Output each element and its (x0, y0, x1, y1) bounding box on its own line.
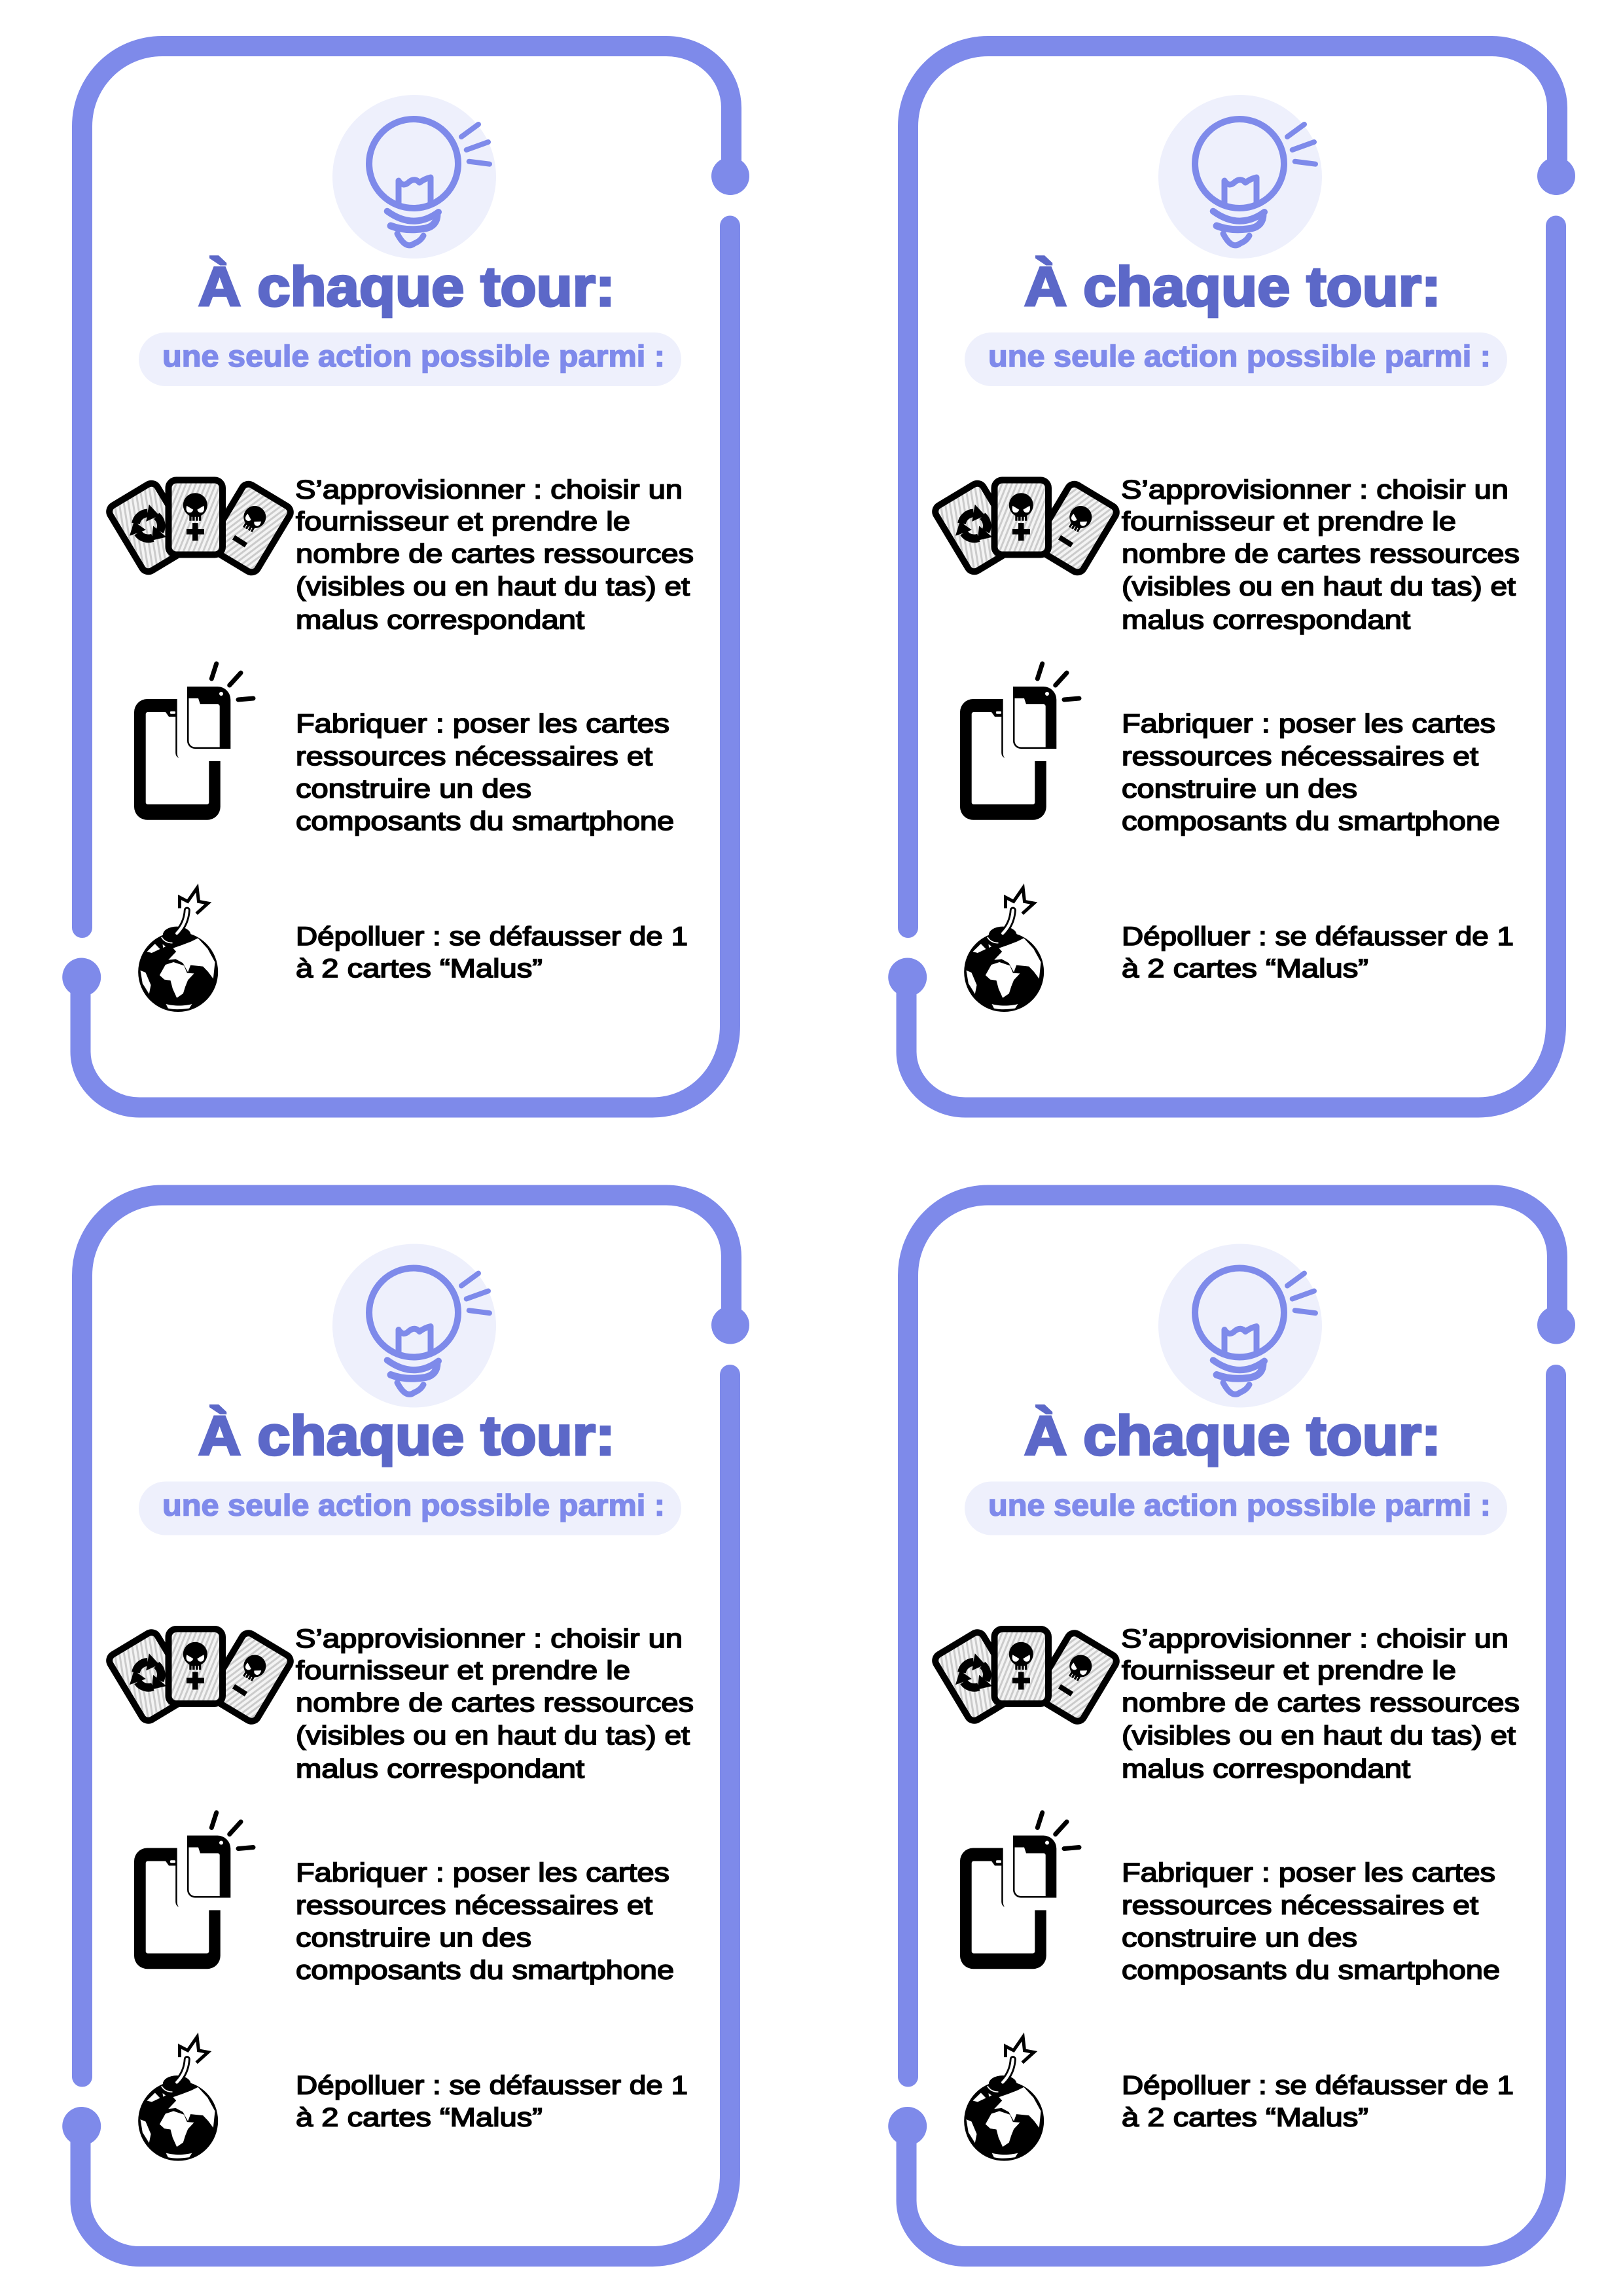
text: fabriquer: construire un des (296, 1924, 531, 1952)
text: fabriquer: Fabriquer : poser les cartes (1122, 1859, 1495, 1888)
icon: light bulb (1158, 95, 1322, 259)
subtitle pill (139, 1482, 681, 1535)
text: fabriquer: composants du smartphone (296, 807, 674, 836)
icon: cards (933, 1629, 1119, 1724)
text: dépolluer (296, 922, 688, 983)
text: s'approvisionner: S’approvisionner : choisir un (295, 475, 683, 504)
subtitle pill: une seule action possible parmi : (988, 1488, 1491, 1522)
icon: smartphone (960, 664, 1079, 820)
text: fabriquer: construire un des (1122, 1924, 1357, 1952)
card frame (888, 46, 1575, 1107)
subtitle pill: une seule action possible parmi : (162, 339, 665, 373)
text: s'approvisionner: fournisseur et prendre le (1122, 1656, 1456, 1685)
text: s'approvisionner: nombre de cartes ressources (1122, 539, 1520, 568)
icon: earth bomb (138, 888, 218, 1012)
icon: light bulb (332, 95, 496, 259)
title: À chaque tour: (198, 256, 615, 317)
text: s'approvisionner: malus correspondant (1122, 1755, 1410, 1784)
subtitle pill (139, 332, 681, 386)
text: fabriquer: Fabriquer : poser les cartes (1122, 709, 1495, 738)
text: fabriquer: composants du smartphone (1122, 807, 1500, 836)
icon: cards (107, 480, 293, 575)
icon: cards (933, 480, 1119, 575)
icon: light bulb (1158, 1244, 1322, 1407)
text: fabriquer: composants du smartphone (296, 1956, 674, 1984)
text: fabriquer: ressources nécessaires et (1122, 1892, 1478, 1920)
icon: earth bomb (964, 888, 1044, 1012)
text: s'approvisionner (295, 475, 694, 635)
text: fabriquer: composants du smartphone (1122, 1956, 1500, 1984)
text: fabriquer: Fabriquer : poser les cartes (296, 709, 669, 738)
card frame (62, 46, 749, 1107)
title: À chaque tour: (1024, 1405, 1441, 1466)
text: s'approvisionner (1121, 475, 1520, 635)
text: s'approvisionner (295, 1624, 694, 1784)
text: fabriquer: Fabriquer : poser les cartes (296, 1859, 669, 1888)
subtitle pill (965, 332, 1507, 386)
text: fabriquer (296, 709, 674, 836)
text: dépolluer (1122, 922, 1514, 983)
text: fabriquer: ressources nécessaires et (1122, 742, 1478, 771)
text: fabriquer (1122, 709, 1500, 836)
text: fabriquer: ressources nécessaires et (296, 1892, 652, 1920)
icon: cards (107, 1629, 293, 1724)
text: s'approvisionner: nombre de cartes ressources (296, 539, 694, 568)
panel: card top-right (888, 46, 1575, 1107)
text: fabriquer (1122, 1859, 1500, 1984)
text: s'approvisionner: (visibles ou en haut du tas) et (296, 1721, 690, 1750)
icon: earth bomb (964, 2037, 1044, 2161)
text: s'approvisionner: (visibles ou en haut du tas) et (1122, 1721, 1516, 1750)
title: À chaque tour: (198, 1405, 615, 1466)
text: s'approvisionner: nombre de cartes ressources (1122, 1689, 1520, 1717)
panel: card bottom-left (62, 1195, 749, 2257)
card frame (888, 1195, 1575, 2257)
card frame (62, 1195, 749, 2257)
text: dépolluer: à 2 cartes “Malus” (296, 954, 543, 983)
text: s'approvisionner: S’approvisionner : choisir un (1121, 1624, 1508, 1653)
text: s'approvisionner (1121, 1624, 1520, 1784)
text: dépolluer: Dépolluer : se défausser de 1 (1122, 2071, 1514, 2100)
text: s'approvisionner: malus correspondant (296, 606, 584, 635)
panel: card top-left (62, 46, 749, 1107)
text: s'approvisionner: fournisseur et prendre le (1122, 507, 1456, 536)
text: s'approvisionner: fournisseur et prendre le (296, 507, 630, 536)
icon: smartphone (960, 1813, 1079, 1969)
text: s'approvisionner: (visibles ou en haut du tas) et (1122, 572, 1516, 601)
text: s'approvisionner: fournisseur et prendre le (296, 1656, 630, 1685)
icon: light bulb (332, 1244, 496, 1407)
text: s'approvisionner: nombre de cartes ressources (296, 1689, 694, 1717)
text: s'approvisionner: malus correspondant (296, 1755, 584, 1784)
text: s'approvisionner: S’approvisionner : choisir un (295, 1624, 683, 1653)
text: fabriquer (296, 1859, 674, 1984)
text: dépolluer: à 2 cartes “Malus” (296, 2104, 543, 2132)
subtitle pill: une seule action possible parmi : (988, 339, 1491, 373)
text: fabriquer: ressources nécessaires et (296, 742, 652, 771)
panel: card bottom-right (888, 1195, 1575, 2257)
text: s'approvisionner: malus correspondant (1122, 606, 1410, 635)
subtitle pill (965, 1482, 1507, 1535)
text: dépolluer: Dépolluer : se défausser de 1 (1122, 922, 1514, 951)
text: dépolluer: à 2 cartes “Malus” (1122, 954, 1368, 983)
text: s'approvisionner: S’approvisionner : choisir un (1121, 475, 1508, 504)
icon: smartphone (134, 664, 253, 820)
text: dépolluer: Dépolluer : se défausser de 1 (296, 2071, 688, 2100)
text: dépolluer (296, 2071, 688, 2132)
text: dépolluer (1122, 2071, 1514, 2132)
subtitle pill: une seule action possible parmi : (162, 1488, 665, 1522)
text: dépolluer: Dépolluer : se défausser de 1 (296, 922, 688, 951)
title: À chaque tour: (1024, 256, 1441, 317)
icon: smartphone (134, 1813, 253, 1969)
text: dépolluer: à 2 cartes “Malus” (1122, 2104, 1368, 2132)
text: fabriquer: construire un des (296, 775, 531, 804)
text: fabriquer: construire un des (1122, 775, 1357, 804)
icon: earth bomb (138, 2037, 218, 2161)
text: s'approvisionner: (visibles ou en haut du tas) et (296, 572, 690, 601)
